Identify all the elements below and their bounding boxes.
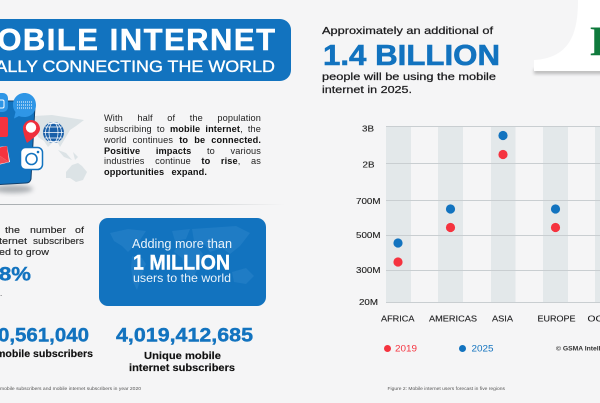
trailing mark: .: [0, 289, 2, 298]
stat: unique mobile internet subscribers: [116, 326, 253, 374]
growth text: [0, 225, 85, 257]
growth text: number: [30, 225, 66, 235]
video icon: [0, 117, 8, 137]
y axis labels: 500M: [356, 230, 380, 240]
stat: unique mobile internet subscribers: internet subscribers: [129, 363, 236, 374]
logo card: [534, 0, 600, 74]
callout: adding more than 1 million: [99, 218, 266, 306]
stat: mobile subscribers: [0, 326, 94, 360]
y axis labels: 2B: [362, 160, 375, 170]
intro paragraph: Positive impacts to various: [104, 146, 261, 156]
intro paragraph: [104, 113, 261, 177]
title banner: [0, 19, 291, 81]
intro paragraph: With half of the population: [104, 113, 261, 123]
category labels: EUROPE: [538, 314, 576, 324]
legend: [384, 344, 494, 354]
y axis labels: 3B: [362, 124, 374, 134]
callout text: Adding more than: [132, 237, 232, 251]
intro paragraph: subscribing to mobile internet, the: [104, 124, 261, 134]
data points 2019: [393, 150, 560, 267]
mail icon: [0, 146, 10, 167]
dot chart: mobile internet users by region: [356, 124, 600, 324]
growth text: subscribers: [33, 236, 84, 246]
category labels: ASIA: [492, 314, 513, 324]
callout: adding more than 1 million: users to the world: [133, 271, 231, 285]
y axis labels: 20M: [359, 297, 378, 307]
category labels: [381, 314, 600, 324]
intro paragraph: world continues to be connected.: [104, 135, 261, 145]
big number: 1.4 BILLION: [323, 40, 500, 72]
chat bubble icon: [13, 93, 36, 118]
stat: mobile subscribers: 0,561,040: [0, 326, 89, 346]
data points 2025: [393, 131, 560, 248]
callout: adding more than 1 million: 1 MILLION: [133, 252, 230, 274]
phone: [0, 101, 35, 185]
headline: additional users: internet in 2025.: [322, 84, 412, 96]
divider: [0, 204, 285, 205]
instagram icon: [20, 148, 42, 170]
intro paragraph: industries continue to rise, as: [104, 156, 261, 166]
y axis labels: 700M: [356, 196, 380, 206]
category labels: AMERICAS: [429, 314, 477, 324]
legend: 2019: [395, 344, 417, 354]
legend: 2025: [472, 344, 494, 354]
headline: additional users: people will be using the mobile: [322, 71, 496, 83]
intro paragraph: opportunities expand.: [104, 167, 207, 177]
stat: unique mobile internet subscribers: Unique mobile: [144, 351, 222, 362]
headline: additional users: Approximately an additional of: [322, 25, 493, 37]
callout world map: [110, 226, 254, 290]
stat: unique mobile internet subscribers: 4,019,412,685: [116, 326, 253, 346]
headline: additional users: [322, 25, 500, 96]
growth text: ed to grow: [0, 247, 49, 257]
illustration: phone with app icons: [0, 93, 64, 193]
growth text: the: [5, 225, 20, 235]
growth text: of: [75, 225, 85, 235]
figure caption: Figure 2: Mobile internet users forecast in five regions: [388, 386, 505, 391]
footnote: mobile subscribers and mobile internet subscribers in year 2020: [0, 386, 142, 391]
world map behind phone: [34, 115, 87, 182]
like icon: [0, 93, 8, 112]
category labels: AFRICA: [381, 314, 415, 324]
y axis labels: 300M: [356, 265, 380, 275]
y axis labels: [356, 124, 380, 307]
location pin: [23, 120, 40, 143]
globe icon: [43, 122, 64, 143]
